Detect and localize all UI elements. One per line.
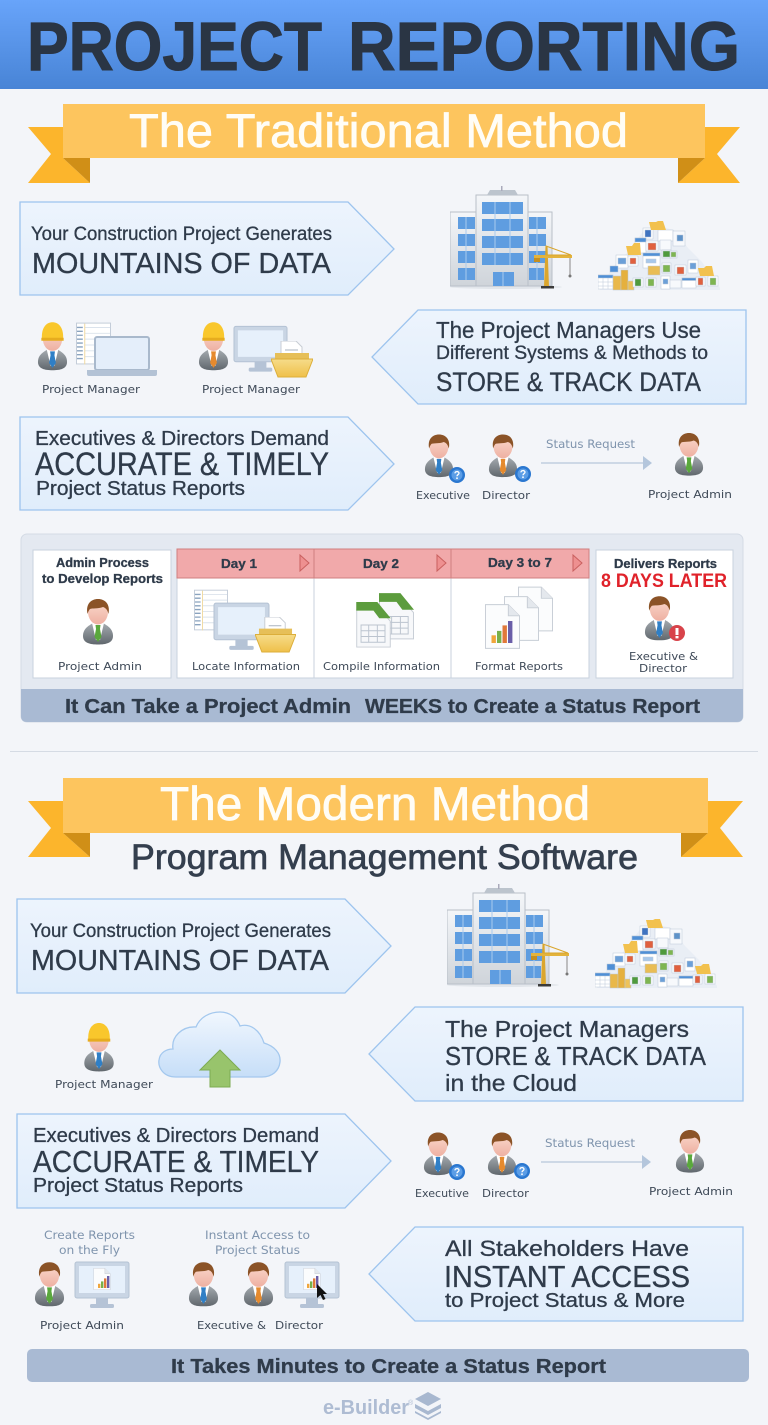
instant access: executive and director with monitor: Director <box>275 1319 324 1332</box>
arrow panel: store and track data in the cloud <box>369 1007 743 1101</box>
status request flow, modern: Executive <box>415 1187 469 1200</box>
arrow panel: accurate and timely: Project Status Reports <box>36 478 245 500</box>
banner: The Modern Method <box>28 777 743 857</box>
banner: The Modern Method: The Modern Method <box>160 777 590 830</box>
status request flow, traditional: Status Request <box>546 437 636 451</box>
step: delivers reports <box>596 550 733 678</box>
arrow panel: instant access: All Stakeholders Have <box>445 1236 689 1261</box>
logo: e-Builder <box>323 1392 441 1420</box>
status request flow, traditional: Director <box>482 489 531 502</box>
project manager with monitor and folder <box>199 322 313 396</box>
arrow panel: mountains of data, modern <box>17 899 391 993</box>
arrow panel: accurate and timely, modern: Project Status Reports <box>33 1175 243 1197</box>
logo: e-Builder: ® <box>408 1399 414 1407</box>
panel: traditional admin process timeline <box>21 534 743 722</box>
project manager with monitor and folder: Project Manager <box>202 383 301 396</box>
arrow panel: store and track data: STORE & TRACK DATA <box>436 367 701 397</box>
subtitle: Program Management Software: Program Management Software <box>131 838 638 877</box>
arrow panel: instant access: INSTANT ACCESS <box>444 1259 690 1294</box>
status request flow, traditional <box>416 433 732 502</box>
arrow panel: accurate and timely <box>20 417 394 510</box>
create reports on the fly: admin with monitor: Project Admin <box>40 1319 124 1332</box>
arrow panel: instant access: to Project Status & More <box>445 1290 685 1312</box>
create reports on the fly: admin with monitor: on the Fly <box>59 1243 120 1257</box>
panel: traditional admin process timeline: It Can Take a Project Admin <box>65 696 351 718</box>
step: delivers reports: Director <box>639 662 688 675</box>
arrow panel: store and track data <box>372 310 746 404</box>
status request flow, traditional: Executive <box>416 489 470 502</box>
instant access: executive and director with monitor: Project Status <box>215 1243 300 1257</box>
logo: e-Builder: e-Builder <box>323 1397 409 1419</box>
steps: day 1 to day 7 timeline: Day 3 to 7 <box>488 555 552 570</box>
icon: pile of data files, modern <box>595 919 717 988</box>
project manager uploading to the cloud: Project Manager <box>55 1078 154 1091</box>
header band with title: PROJECT <box>27 8 322 85</box>
banner: The Traditional Method: The Traditional Method <box>129 104 628 157</box>
summary bar: It Takes Minutes to Create a Status Report <box>171 1355 606 1378</box>
step: delivers reports: Delivers Reports <box>614 557 717 571</box>
step: admin process <box>33 550 171 678</box>
step: delivers reports: Executive & <box>629 650 698 663</box>
arrow panel: instant access <box>369 1227 743 1321</box>
arrow panel: accurate and timely: Executives & Directors Demand <box>35 428 329 450</box>
arrow panel: mountains of data, modern: Your Construction Project Generates <box>30 921 331 942</box>
instant access: executive and director with monitor <box>189 1228 339 1332</box>
status request flow, modern: Status Request <box>545 1136 636 1150</box>
arrow panel: store and track data in the cloud: The Project Managers <box>445 1016 689 1042</box>
steps: day 1 to day 7 timeline: Day 2 <box>363 556 399 571</box>
icon: locate information <box>194 590 296 652</box>
create reports on the fly: admin with monitor: Create Reports <box>44 1228 135 1242</box>
banner: The Traditional Method <box>28 104 740 183</box>
steps: day 1 to day 7 timeline: Locate Information <box>192 660 300 673</box>
step: admin process: to Develop Reports <box>42 572 163 586</box>
status request flow, modern <box>415 1130 733 1200</box>
arrow panel: mountains of data, modern: MOUNTAINS OF DATA <box>31 945 330 977</box>
arrow panel: accurate and timely: ACCURATE & TIMELY <box>35 446 329 482</box>
icon: building with crane <box>450 186 572 289</box>
arrow panel: store and track data: Different Systems & Methods to <box>436 343 708 364</box>
arrow panel: store and track data: The Project Managers Use <box>436 317 701 343</box>
project manager with laptop and documents: Project Manager <box>42 383 141 396</box>
arrow panel: mountains of data: MOUNTAINS OF DATA <box>32 248 332 280</box>
arrow panel: mountains of data: Your Construction Project Generates <box>31 224 332 245</box>
status request flow, modern: Project Admin <box>649 1185 733 1198</box>
header band with title: REPORTING <box>348 8 740 85</box>
icon: building with crane, modern <box>447 884 569 987</box>
panel: traditional admin process timeline: WEEKS to Create a Status Report <box>365 696 700 718</box>
header band with title <box>0 0 768 89</box>
status request flow, modern: Director <box>482 1187 529 1200</box>
arrow panel: accurate and timely, modern <box>17 1114 391 1208</box>
summary bar <box>27 1349 749 1382</box>
project manager uploading to the cloud <box>55 1012 280 1091</box>
icon: cloud <box>159 1012 280 1077</box>
create reports on the fly: admin with monitor <box>35 1228 135 1332</box>
arrow panel: mountains of data <box>20 202 394 295</box>
icon: pile of data files <box>598 221 720 290</box>
arrow panel: accurate and timely, modern: Executives & Directors Demand <box>33 1125 319 1147</box>
steps: day 1 to day 7 timeline: Day 1 <box>221 556 257 571</box>
icon: format report documents <box>485 587 553 648</box>
instant access: executive and director with monitor: Instant Access to <box>205 1228 310 1242</box>
arrow panel: store and track data in the cloud: STORE & TRACK DATA <box>445 1041 707 1071</box>
step: delivers reports: 8 DAYS LATER <box>601 571 727 592</box>
steps: day 1 to day 7 timeline: Compile Information <box>323 660 440 673</box>
instant access: executive and director with monitor: Executive & <box>197 1319 266 1332</box>
step: admin process: Admin Process <box>56 556 149 570</box>
arrow panel: accurate and timely, modern: ACCURATE & TIMELY <box>33 1144 319 1179</box>
steps: day 1 to day 7 timeline <box>177 549 589 678</box>
step: admin process: Project Admin <box>58 660 142 673</box>
icon: upload arrow <box>200 1050 240 1087</box>
arrow panel: store and track data in the cloud: in the Cloud <box>445 1070 577 1096</box>
project manager with laptop and documents <box>38 322 157 396</box>
steps: day 1 to day 7 timeline: Format Reports <box>475 660 563 673</box>
icon: compile spreadsheets <box>356 593 414 647</box>
status request flow, traditional: Project Admin <box>648 488 732 501</box>
